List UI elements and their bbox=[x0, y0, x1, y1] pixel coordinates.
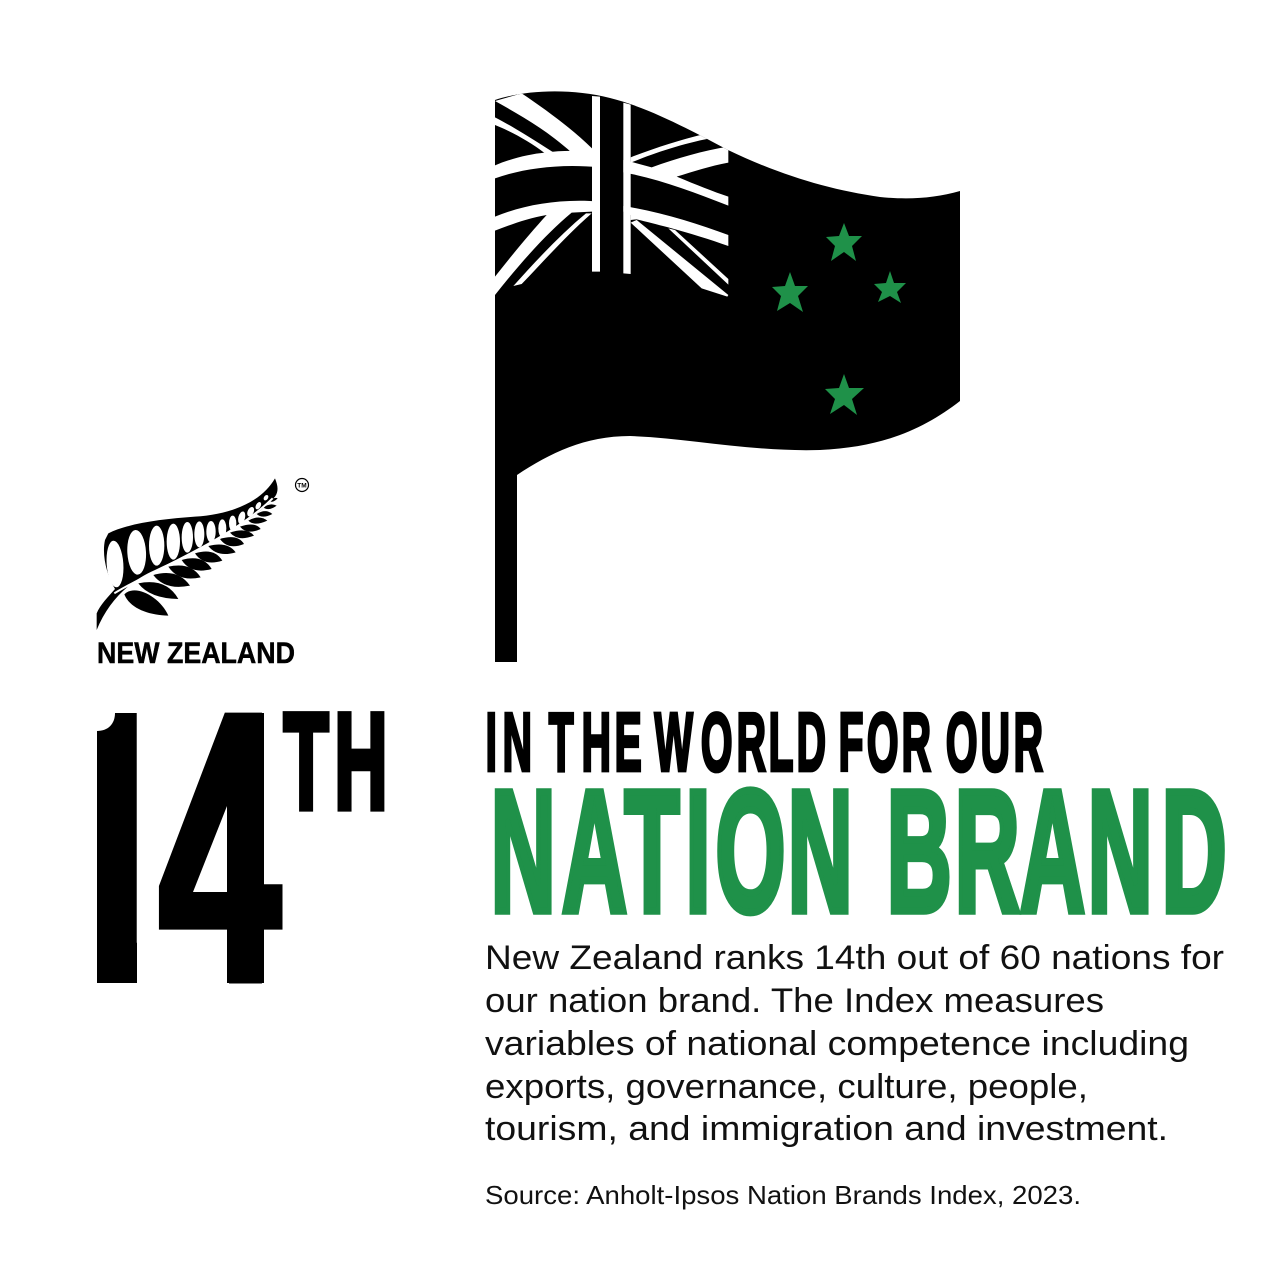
flag bbox=[495, 91, 960, 662]
body text bbox=[485, 939, 1224, 1148]
trademark symbol: TM bbox=[297, 482, 307, 490]
trademark symbol bbox=[296, 478, 308, 492]
numeral 1: 1 bbox=[28, 625, 191, 1067]
star 1 bbox=[826, 223, 862, 261]
body text: variables of national competence including bbox=[485, 1025, 1189, 1063]
star 2 bbox=[772, 272, 808, 312]
logo: silver fern bbox=[97, 478, 308, 670]
heading line 1: IN THE WORLD FOR OUR bbox=[486, 696, 1043, 788]
wordmark: NEW ZEALAND bbox=[97, 637, 295, 670]
big number 14th bbox=[97, 711, 384, 984]
heading line 2: NATION BRAND bbox=[491, 755, 1227, 949]
star 4 bbox=[825, 374, 864, 415]
numeral 4: 4 bbox=[157, 632, 283, 1062]
union jack canton bbox=[495, 93, 728, 297]
superscript TH: TH bbox=[284, 685, 388, 838]
source note: Source: Anholt-Ipsos Nation Brands Index, 2023. bbox=[485, 1180, 1081, 1210]
flag body and pole bbox=[495, 91, 960, 662]
body text: exports, governance, culture, people, bbox=[485, 1068, 1088, 1106]
body text: tourism, and immigration and investment. bbox=[485, 1110, 1168, 1148]
body text: our nation brand. The Index measures bbox=[485, 982, 1104, 1020]
numeral 4 weight adjustment bbox=[186, 713, 264, 983]
stars bbox=[772, 223, 906, 415]
body text: New Zealand ranks 14th out of 60 nations for bbox=[485, 939, 1224, 977]
star 3 bbox=[874, 271, 906, 303]
fern bbox=[97, 478, 278, 630]
